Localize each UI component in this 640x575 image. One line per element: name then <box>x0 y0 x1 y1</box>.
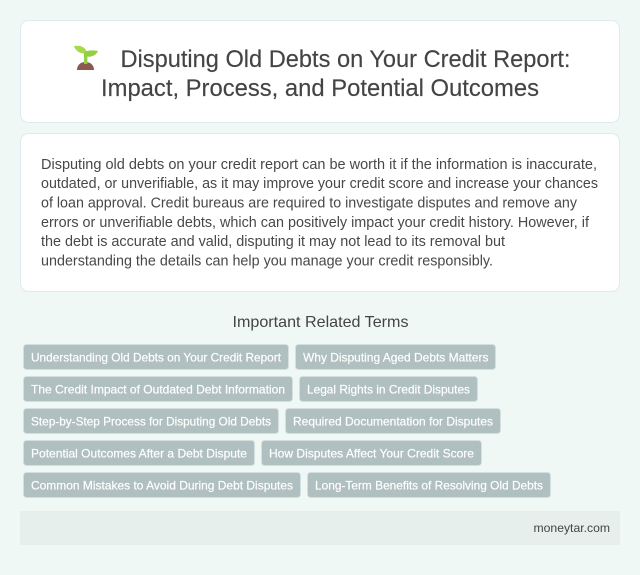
footer: moneytar.com <box>534 521 610 535</box>
tag: how disputes affect score <box>262 440 482 466</box>
tag: step-by-step process <box>24 408 278 434</box>
tag: long-term benefits <box>308 472 550 498</box>
tag: common mistakes: Common Mistakes to Avoid During Debt Disputes <box>31 478 293 492</box>
panel: summary text: of loan approval. Credit bureaus are required to investigate disputes and remove any <box>41 196 578 212</box>
panel: summary text: errors or unverifiable debts, which can positively impact your credit history. However, if <box>41 215 590 231</box>
panel: title card <box>20 20 620 122</box>
tag: potential outcomes <box>24 440 254 466</box>
panel: summary text: outdated, or unverifiable, as it may improve your credit score and increase your chances <box>41 176 598 192</box>
tag: how disputes affect score: How Disputes Affect Your Credit Score <box>269 446 474 460</box>
tag: potential outcomes: Potential Outcomes After a Debt Dispute <box>31 446 247 460</box>
tag: step-by-step process: Step-by-Step Process for Disputing Old Debts <box>31 414 271 428</box>
tag: why disputing aged debts matters <box>296 344 496 370</box>
panel: summary text: the debt is accurate and valid, disputing it may not lead to its removal but <box>41 234 505 250</box>
tag: credit impact: The Credit Impact of Outdated Debt Information <box>31 382 285 396</box>
tag: long-term benefits: Long-Term Benefits of Resolving Old Debts <box>315 478 543 492</box>
tag: understanding old debts: Understanding Old Debts on Your Credit Report <box>31 350 282 364</box>
tag: why disputing aged debts matters: Why Disputing Aged Debts Matters <box>303 350 488 364</box>
tag: legal rights: Legal Rights in Credit Disputes <box>307 382 470 396</box>
tag: common mistakes <box>24 472 300 498</box>
panel: summary text: Disputing old debts on your credit report can be worth it if the information is inaccurate, <box>41 157 597 173</box>
tag: legal rights <box>300 376 478 402</box>
tag: required documentation <box>286 408 500 434</box>
heading: important related terms: Important Related Terms <box>232 314 408 331</box>
panel: summary text <box>20 134 620 292</box>
title: Impact, Process, and Potential Outcomes <box>101 75 539 102</box>
tag: credit impact <box>24 376 292 402</box>
tag: understanding old debts <box>24 344 288 370</box>
title: Disputing Old Debts on Your Credit Report: <box>120 46 570 73</box>
footer <box>20 511 620 545</box>
icon: seedling <box>74 46 98 70</box>
tag: required documentation: Required Documentation for Disputes <box>293 414 493 428</box>
title <box>101 46 570 102</box>
panel: related term tags <box>24 344 550 498</box>
panel: summary text: understanding the details can help you manage your credit responsibly. <box>41 254 493 270</box>
